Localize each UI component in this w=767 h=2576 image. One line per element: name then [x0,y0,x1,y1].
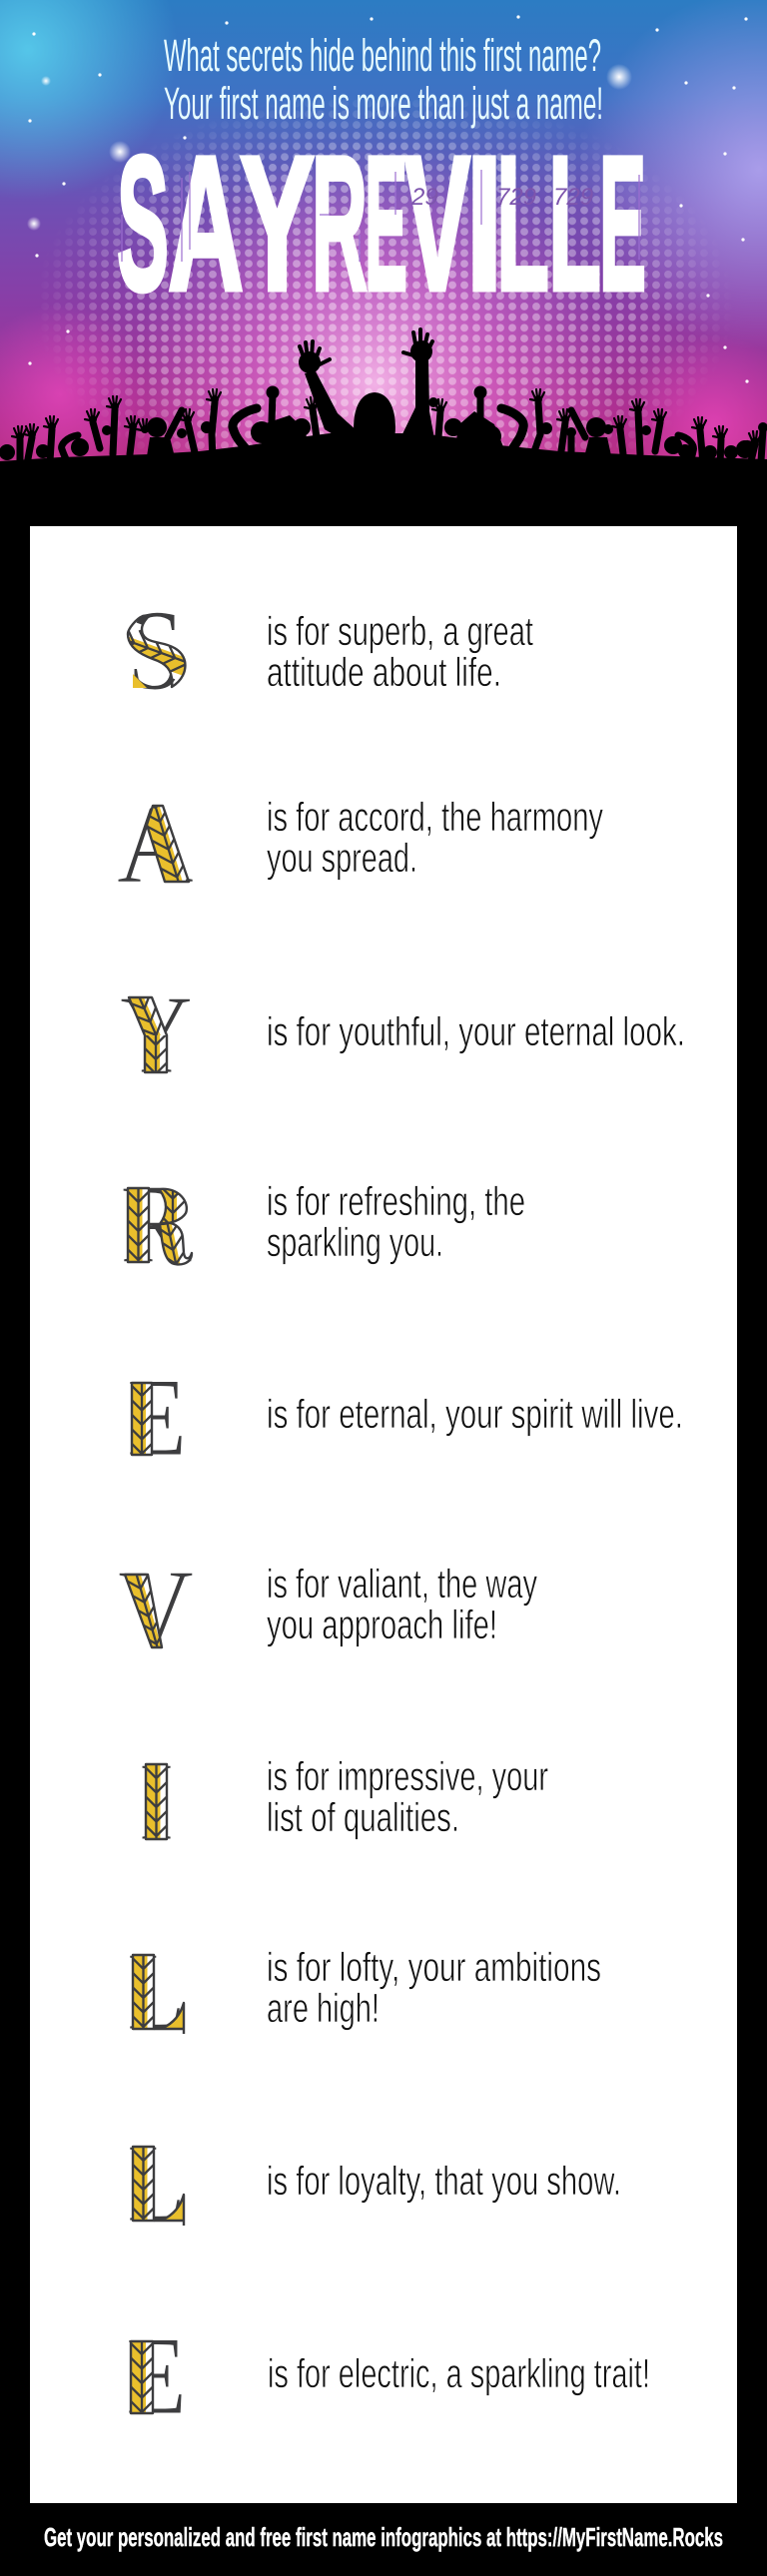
icon: letter V: V [118,1548,194,1671]
title: S [117,116,169,330]
text S: attitude about life. [267,649,501,695]
icon: letter A [118,805,193,883]
row V [120,1568,537,1649]
title: 729 [496,184,536,211]
text V: is for valiant, the way [267,1561,537,1607]
row A [118,801,603,883]
row E [130,1382,680,1456]
title: 29 [410,184,438,211]
icon: letter E [130,1382,182,1456]
icon: letter L [130,1953,186,2034]
row L [130,1951,600,2034]
icon: letter L: L [127,1930,186,2054]
text V [267,1561,537,1647]
icon: letter V [120,1574,192,1649]
title: 729 [553,184,593,211]
text R: sparkling you. [267,1219,443,1265]
title: L [548,116,601,330]
row L second [130,2145,619,2226]
icon: letter E: E [126,2314,187,2438]
row I [142,1761,547,1841]
text L second: is for loyalty, that you show. [267,2158,621,2204]
text A [267,794,603,881]
title: R [312,116,368,330]
title: L [496,116,549,330]
text L: are high! [267,1985,380,2031]
intro text [164,30,603,129]
text I: list of qualities. [267,1794,459,1840]
icon: letter E: E [127,1356,187,1480]
row S [126,613,533,689]
header concert background [0,0,767,461]
crowd silhouette [0,329,767,526]
text I: is for impressive, your [267,1753,548,1799]
icon: letter I [142,1763,171,1841]
icon: letter I: I [138,1740,175,1864]
title: A [168,116,244,330]
title: I [465,116,503,330]
icon: letter L [130,2145,186,2226]
title: Y [240,116,315,330]
icon: letter A: A [117,783,194,907]
title: E [365,116,407,330]
text A: is for accord, the harmony [267,794,603,840]
row Y [122,996,682,1074]
row R [124,1186,524,1266]
text R [267,1178,525,1265]
text S: is for superb, a great [267,608,533,654]
text R: is for refreshing, the [267,1178,525,1224]
icon: letter S [126,613,187,689]
icon: letter L: L [127,2122,186,2246]
panel: letters [30,526,737,2503]
text V: you approach life! [267,1602,497,1647]
icon: letter Y: Y [120,973,193,1097]
row E second [129,2340,647,2414]
text I [267,1753,548,1840]
title [117,116,646,330]
text A: you spread. [267,835,417,881]
text S [267,608,533,695]
icon: letter Y [122,996,190,1074]
title: V [404,116,470,330]
text L [267,1944,601,2031]
text L: is for lofty, your ambitions [267,1944,601,1990]
icon: letter R [124,1186,194,1266]
icon: letter R: R [120,1163,192,1287]
icon: letter S: S [127,587,185,715]
text: E [599,116,646,330]
icon: letter E [129,2340,182,2414]
